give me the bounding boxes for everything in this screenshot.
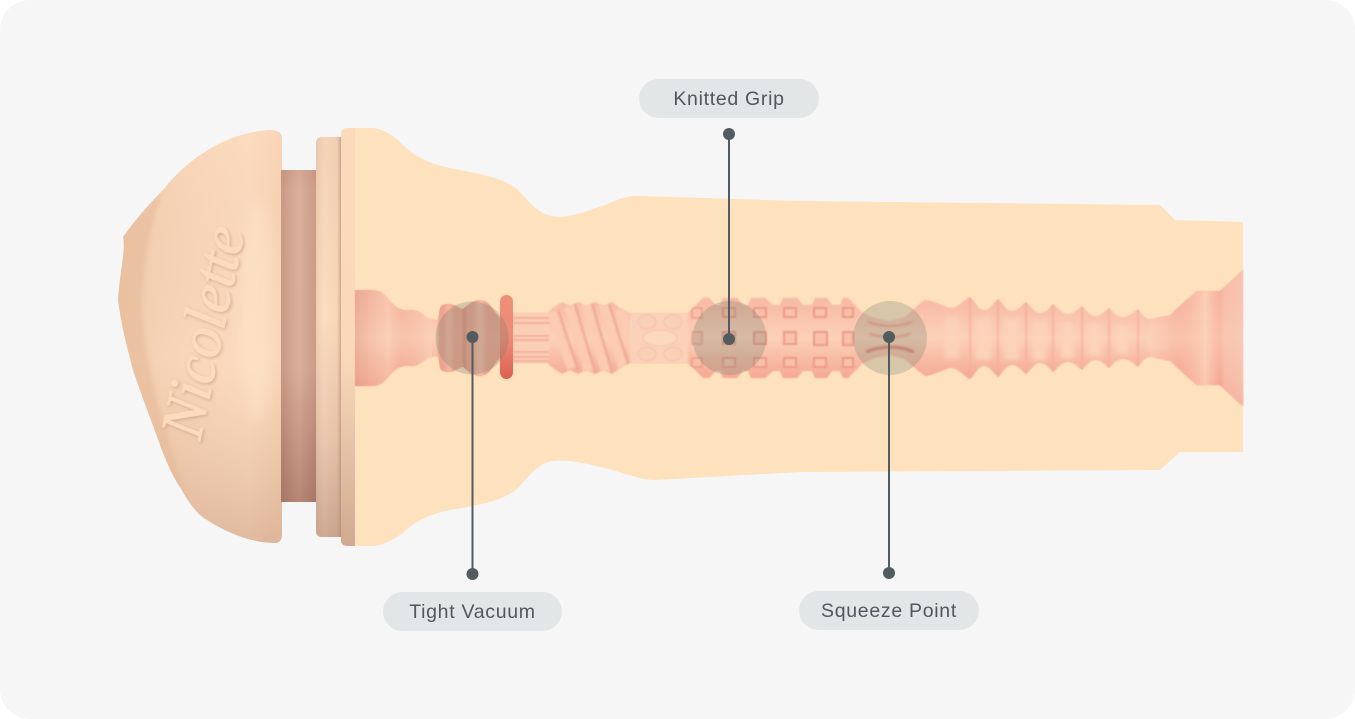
neck: [281, 170, 317, 502]
highlight circle: squeeze point: [853, 301, 927, 375]
product illustration: [110, 125, 1243, 550]
leader line: knitted grip: [728, 134, 730, 338]
end cap with signature: [118, 130, 282, 543]
twisted section: [552, 304, 630, 372]
callout: squeeze point: [799, 301, 979, 630]
label pill: knitted grip: Knitted Grip: [673, 88, 785, 110]
exit flare: [1162, 272, 1243, 406]
tight vacuum chamber: [437, 300, 500, 376]
inner channel cross-section: [354, 270, 1244, 406]
flange ring outer: [316, 137, 342, 537]
entry section: [355, 290, 432, 386]
label pill: knitted grip: [639, 79, 819, 118]
leader line: squeeze point: [888, 338, 890, 573]
sleeve body: [355, 128, 1243, 546]
marker dots: knitted grip: [723, 128, 735, 345]
leader line: tight vacuum: [472, 338, 474, 574]
straight ribbed section: [513, 313, 549, 363]
label pill: squeeze point: [799, 591, 979, 630]
flange ring inner: [341, 128, 356, 546]
highlight circle: knitted grip: [692, 301, 766, 375]
callout: knitted grip: [639, 79, 819, 375]
label pill: tight vacuum: [383, 592, 562, 631]
squeeze point bands: [866, 322, 914, 352]
marker dots: tight vacuum: [466, 331, 478, 580]
junction section: [630, 313, 688, 363]
marker dots: squeeze point: [883, 331, 895, 579]
highlight circle: tight vacuum: [436, 302, 508, 374]
label pill: tight vacuum: Tight Vacuum: [409, 601, 536, 623]
ribbed section: [945, 297, 1140, 379]
knit pattern: [692, 308, 853, 367]
callout: tight vacuum: [383, 302, 562, 631]
signature: Nicolette: [148, 220, 257, 445]
label pill: squeeze point: Squeeze Point: [821, 600, 957, 622]
red retaining ring: [500, 295, 513, 379]
